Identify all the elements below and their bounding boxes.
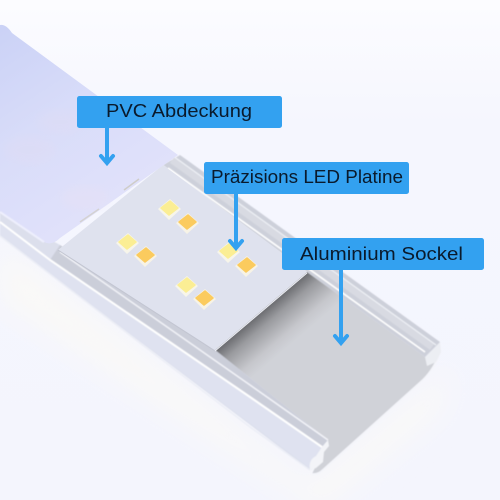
upper rail (163, 155, 440, 358)
lower rail (0, 212, 328, 470)
LED pair 2 (116, 233, 157, 267)
arrow: aluminium base (335, 270, 347, 343)
label: PVC Abdeckung (77, 96, 282, 128)
label: Präzisions LED Platine (204, 162, 409, 194)
floor front lip (312, 352, 440, 474)
cover notches (124, 179, 139, 190)
rail end cap right (425, 342, 441, 366)
soft shadow under the profile (0, 245, 450, 500)
arrow: PVC cover (101, 128, 113, 163)
LED pair 3 (217, 242, 258, 277)
LED pair 4 (175, 276, 216, 310)
label: Präzisions LED Platine: Präzisions LED Platine (211, 167, 403, 187)
arrow: LED board (230, 194, 242, 248)
LED circuit board (58, 165, 307, 351)
PVC cover (0, 25, 178, 243)
label: PVC Abdeckung: PVC Abdeckung (106, 101, 252, 121)
rail end cap (310, 440, 329, 470)
LED pair 1 (158, 199, 199, 234)
label: Aluminium Sockel (282, 238, 484, 270)
label: Aluminium Sockel: Aluminium Sockel (300, 244, 463, 264)
aluminium base profile (0, 155, 441, 474)
floor (215, 272, 440, 474)
